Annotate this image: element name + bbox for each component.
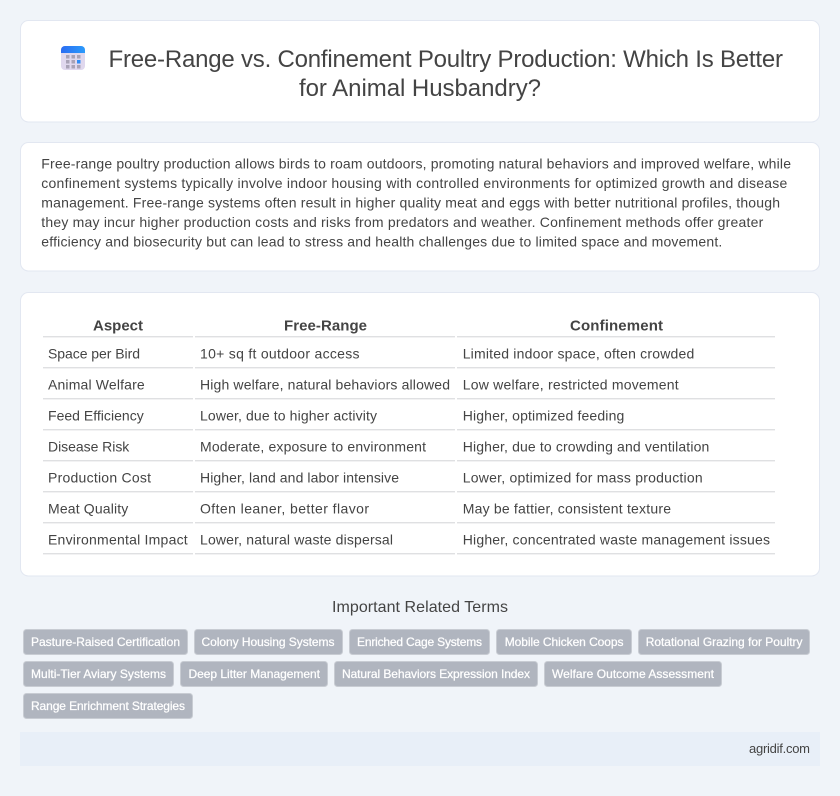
row: disease risk: Disease Risk bbox=[48, 438, 130, 454]
tag: Welfare Outcome Assessment: Welfare Outcome Assessment bbox=[552, 667, 715, 681]
panel: introduction text: efficiency and biosecurity but can lead to stress and health challenges due to limited space and movement. bbox=[41, 233, 722, 249]
row: animal welfare: Low welfare, restricted movement bbox=[463, 376, 679, 392]
row: disease risk: Moderate, exposure to environment bbox=[200, 438, 426, 454]
row: feed efficiency: Higher, optimized feeding bbox=[463, 407, 624, 423]
row: environmental impact: Environmental Impact bbox=[48, 531, 188, 547]
table header row: Aspect bbox=[93, 318, 143, 334]
row: animal welfare: Animal Welfare bbox=[48, 376, 145, 392]
tag: Enriched Cage Systems: Enriched Cage Systems bbox=[357, 635, 482, 649]
tag: Pasture-Raised Certification bbox=[24, 630, 188, 654]
icon: calendar grid bbox=[61, 46, 85, 70]
row: production cost: Higher, land and labor intensive bbox=[200, 469, 399, 485]
tag: Colony Housing Systems: Colony Housing Systems bbox=[202, 635, 334, 649]
tag: Mobile Chicken Coops bbox=[496, 630, 632, 654]
tag: Colony Housing Systems bbox=[194, 630, 342, 654]
tag: Deep Litter Management: Deep Litter Management bbox=[188, 667, 321, 681]
title: for Animal Husbandry? bbox=[299, 75, 541, 102]
row: production cost bbox=[48, 469, 703, 485]
tag: Natural Behaviors Expression Index bbox=[334, 662, 538, 686]
row: animal welfare bbox=[48, 376, 679, 392]
panel: related term tags bbox=[24, 630, 810, 718]
panel: header card bbox=[20, 20, 820, 122]
table header row: Confinement bbox=[570, 318, 663, 334]
tag: Range Enrichment Strategies: Range Enrichment Strategies bbox=[31, 699, 185, 713]
tag: Multi-Tier Aviary Systems: Multi-Tier Aviary Systems bbox=[31, 667, 166, 681]
panel: comparison table bbox=[20, 292, 820, 576]
tag: Deep Litter Management bbox=[180, 662, 328, 686]
row: animal welfare: High welfare, natural behaviors allowed bbox=[200, 376, 450, 392]
footer bbox=[20, 732, 820, 766]
heading: important related terms: Important Related Terms bbox=[332, 599, 508, 616]
table header row: Free-Range bbox=[284, 318, 367, 334]
row: space per bird bbox=[48, 345, 694, 361]
row: environmental impact bbox=[48, 531, 770, 547]
row: meat quality: Often leaner, better flavor bbox=[200, 500, 369, 516]
row: feed efficiency: Lower, due to higher activity bbox=[200, 407, 377, 423]
row: meat quality bbox=[48, 500, 671, 516]
title bbox=[108, 46, 783, 102]
panel: introduction text: confinement systems typically involve indoor housing with controlled environments for optimized growth and disease bbox=[41, 175, 788, 191]
row: feed efficiency: Feed Efficiency bbox=[48, 407, 144, 423]
row: environmental impact: Lower, natural waste dispersal bbox=[200, 531, 393, 547]
row: feed efficiency bbox=[48, 407, 624, 423]
tag: Rotational Grazing for Poultry bbox=[638, 630, 810, 654]
row: meat quality: May be fattier, consistent texture bbox=[463, 500, 671, 516]
row: disease risk bbox=[48, 438, 709, 454]
row: production cost: Production Cost bbox=[48, 469, 151, 485]
panel: introduction text: management. Free-range systems often result in higher quality meat and eggs with better nutritional profiles, though bbox=[41, 194, 780, 210]
tag: Pasture-Raised Certification: Pasture-Raised Certification bbox=[31, 635, 180, 649]
row: space per bird: 10+ sq ft outdoor access bbox=[200, 345, 360, 361]
tag: Range Enrichment Strategies bbox=[24, 694, 192, 718]
panel: introduction text bbox=[20, 142, 820, 271]
row: meat quality: Meat Quality bbox=[48, 500, 128, 516]
footer: agridif.com bbox=[749, 741, 810, 756]
tag: Enriched Cage Systems bbox=[350, 630, 490, 654]
row: disease risk: Higher, due to crowding and ventilation bbox=[463, 438, 709, 454]
tag: Multi-Tier Aviary Systems bbox=[24, 662, 174, 686]
panel: introduction text: Free-range poultry production allows birds to roam outdoors, promoting natural behaviors and improved welfare, while bbox=[41, 155, 791, 171]
tag: Rotational Grazing for Poultry: Rotational Grazing for Poultry bbox=[646, 635, 802, 649]
table header row bbox=[93, 318, 663, 334]
row: space per bird: Space per Bird bbox=[48, 345, 140, 361]
tag: Natural Behaviors Expression Index: Natural Behaviors Expression Index bbox=[342, 667, 530, 681]
row: space per bird: Limited indoor space, often crowded bbox=[463, 345, 694, 361]
panel: introduction text: they may incur higher production costs and risks from predators and weather. Confinement methods offer greater bbox=[41, 214, 764, 230]
title: Free-Range vs. Confinement Poultry Production: Which Is Better bbox=[108, 46, 783, 73]
tag: Welfare Outcome Assessment bbox=[544, 662, 722, 686]
tag: Mobile Chicken Coops: Mobile Chicken Coops bbox=[505, 635, 624, 649]
row: production cost: Lower, optimized for mass production bbox=[463, 469, 703, 485]
row: environmental impact: Higher, concentrated waste management issues bbox=[463, 531, 770, 547]
